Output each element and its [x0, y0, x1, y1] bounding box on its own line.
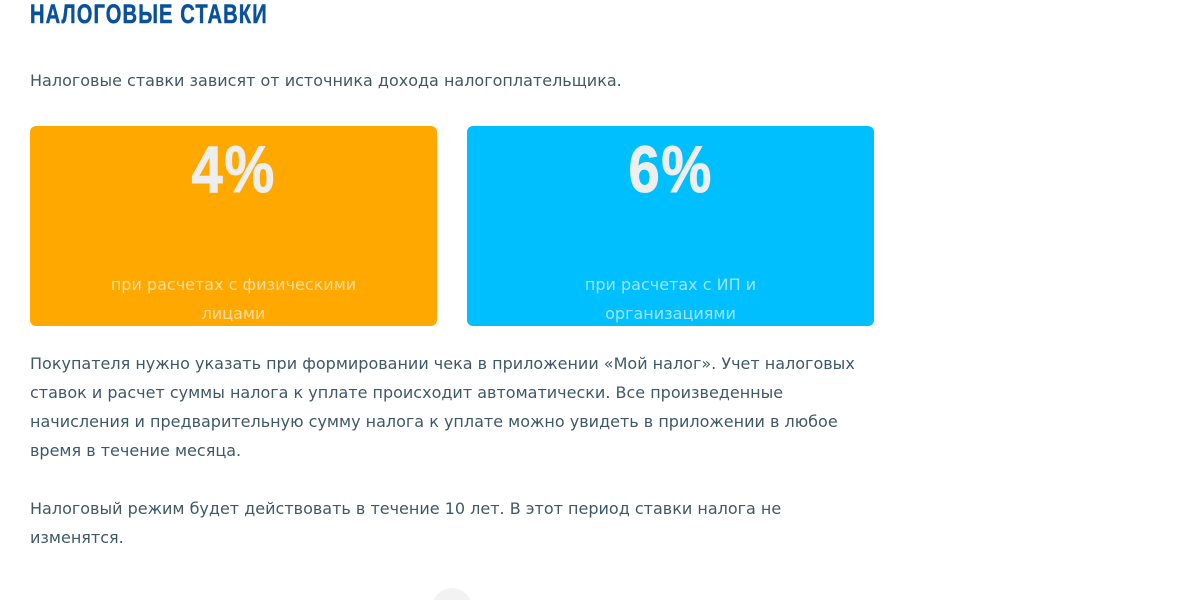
- paragraph: how it works: время в течение месяца.: [30, 441, 241, 460]
- 4% caption: [111, 275, 356, 323]
- paragraph: regime duration: изменятся.: [30, 528, 124, 547]
- decorative circle at bottom: [432, 588, 472, 600]
- paragraph: regime duration: [30, 499, 781, 547]
- 6% caption: [585, 275, 756, 323]
- paragraph: how it works: начисления и предварительную сумму налога к уплате можно увидеть в приложении в любое: [30, 412, 838, 431]
- 4% figure: 4%: [191, 132, 276, 206]
- 6% caption: при расчетах с ИП и: [585, 275, 756, 294]
- paragraph: regime duration: Налоговый режим будет действовать в течение 10 лет. В этот период ставки налога не: [30, 499, 781, 518]
- paragraph: how it works: Покупателя нужно указать при формировании чека в приложении «Мой налог». Учет налоговых: [30, 354, 855, 373]
- paragraph: how it works: [30, 354, 855, 460]
- paragraph: how it works: ставок и расчет суммы налога к уплате происходит автоматически. Все произведенные: [30, 383, 783, 402]
- panel: 4% rate: [30, 126, 437, 326]
- panel: 6% rate: [467, 126, 874, 326]
- intro text: Налоговые ставки зависят от источника дохода налогоплательщика.: [30, 71, 622, 90]
- 6% caption: организациями: [605, 304, 736, 323]
- 6% figure: 6%: [628, 132, 713, 206]
- 4% caption: при расчетах с физическими: [111, 275, 356, 294]
- 4% caption: лицами: [202, 304, 265, 323]
